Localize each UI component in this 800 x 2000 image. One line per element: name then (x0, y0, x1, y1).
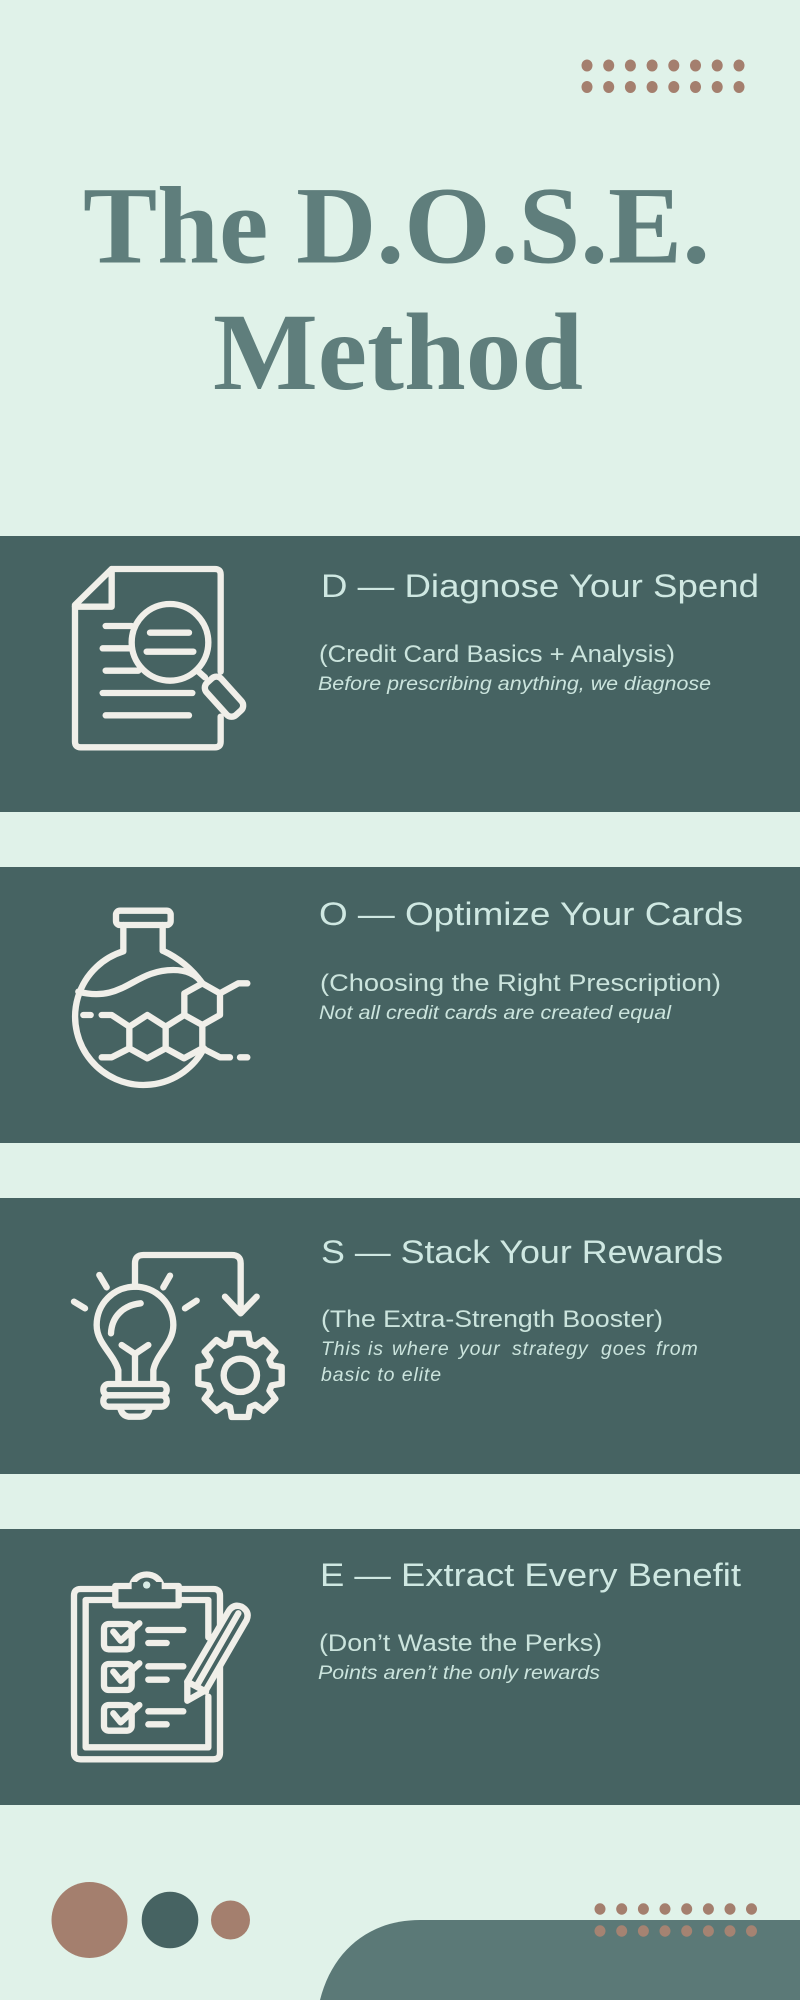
description: S: from (656, 1338, 699, 1360)
heading: S: S — Stack Your Rewards (321, 1234, 723, 1270)
panel: E, Extract (0, 1529, 800, 1805)
description: S: where (392, 1338, 450, 1360)
title (83, 164, 710, 413)
icon: document with magnifier (75, 569, 246, 747)
description: S: This (321, 1338, 361, 1360)
heading: D: D — Diagnose Your Spend (321, 568, 759, 604)
panel: S, Stack (0, 1198, 800, 1474)
description: S: is (368, 1338, 384, 1360)
icon: light bulb and gear (74, 1255, 282, 1417)
title: The D.O.S.E. (83, 164, 710, 286)
description: O: Not all credit cards are created equal (319, 1002, 672, 1024)
description: D: Before prescribing anything, we diagnose (318, 673, 711, 695)
subheading: S: (The Extra-Strength Booster) (321, 1306, 663, 1333)
corner shape: bottom right (320, 1920, 800, 2000)
panel: O, Optimize (0, 867, 800, 1143)
decorative circles: bottom left (52, 1882, 250, 1958)
subheading: E: (Don’t Waste the Perks) (319, 1630, 602, 1657)
description: S: basic to elite (321, 1364, 442, 1386)
decorative dots: top right (582, 60, 744, 93)
heading: E: E — Extract Every Benefit (320, 1557, 741, 1593)
title: Method (213, 291, 583, 413)
icon: flask with molecule (75, 911, 247, 1085)
subheading: O: (Choosing the Right Prescription) (320, 970, 721, 997)
icon: clipboard and pencil (74, 1574, 248, 1759)
description: S: strategy (512, 1338, 589, 1360)
description: E: Points aren’t the only rewards (318, 1662, 600, 1684)
description: S: your (457, 1338, 501, 1360)
heading: O: O — Optimize Your Cards (319, 896, 743, 932)
description: S: goes (601, 1338, 647, 1360)
panel: D, Diagnose (0, 536, 800, 812)
decorative dots: bottom right (594, 1903, 757, 1937)
subheading: D: (Credit Card Basics + Analysis) (319, 641, 675, 668)
